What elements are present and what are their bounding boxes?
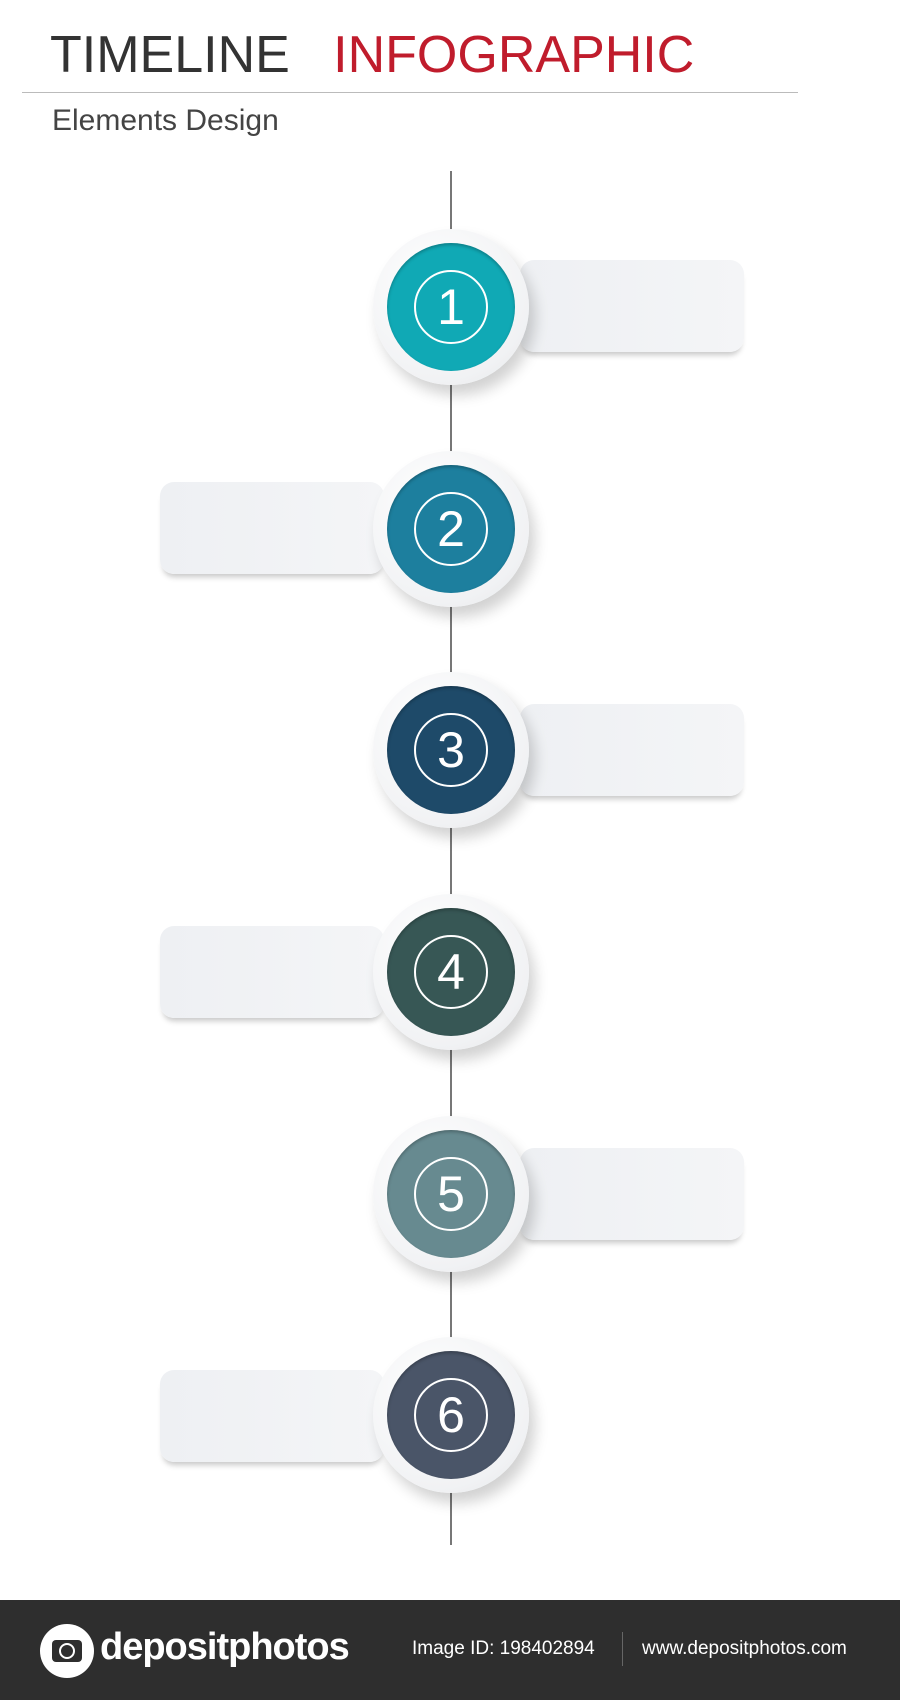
step 4 <box>373 894 529 1050</box>
footer: depositphotos <box>100 1626 349 1668</box>
step 2: 2 <box>437 501 465 557</box>
step 1: 1 <box>437 279 465 335</box>
step 5 <box>373 1116 529 1272</box>
step 5: 5 <box>437 1166 465 1222</box>
timeline axis <box>450 171 452 1545</box>
subtitle: Elements Design <box>52 104 279 137</box>
footer: www.depositphotos.com <box>642 1638 847 1659</box>
step 2 <box>373 451 529 607</box>
footer logo <box>40 1624 94 1678</box>
footer <box>0 1600 900 1700</box>
step 3 <box>373 672 529 828</box>
step 4: 4 <box>437 944 465 1000</box>
image id: Image ID: 198402894 <box>412 1638 595 1659</box>
step 1 <box>373 229 529 385</box>
step 6: 6 <box>437 1387 465 1443</box>
step 6 <box>373 1337 529 1493</box>
title: TIMELINE INFOGRAPHIC <box>50 26 694 84</box>
step 3: 3 <box>437 722 465 778</box>
